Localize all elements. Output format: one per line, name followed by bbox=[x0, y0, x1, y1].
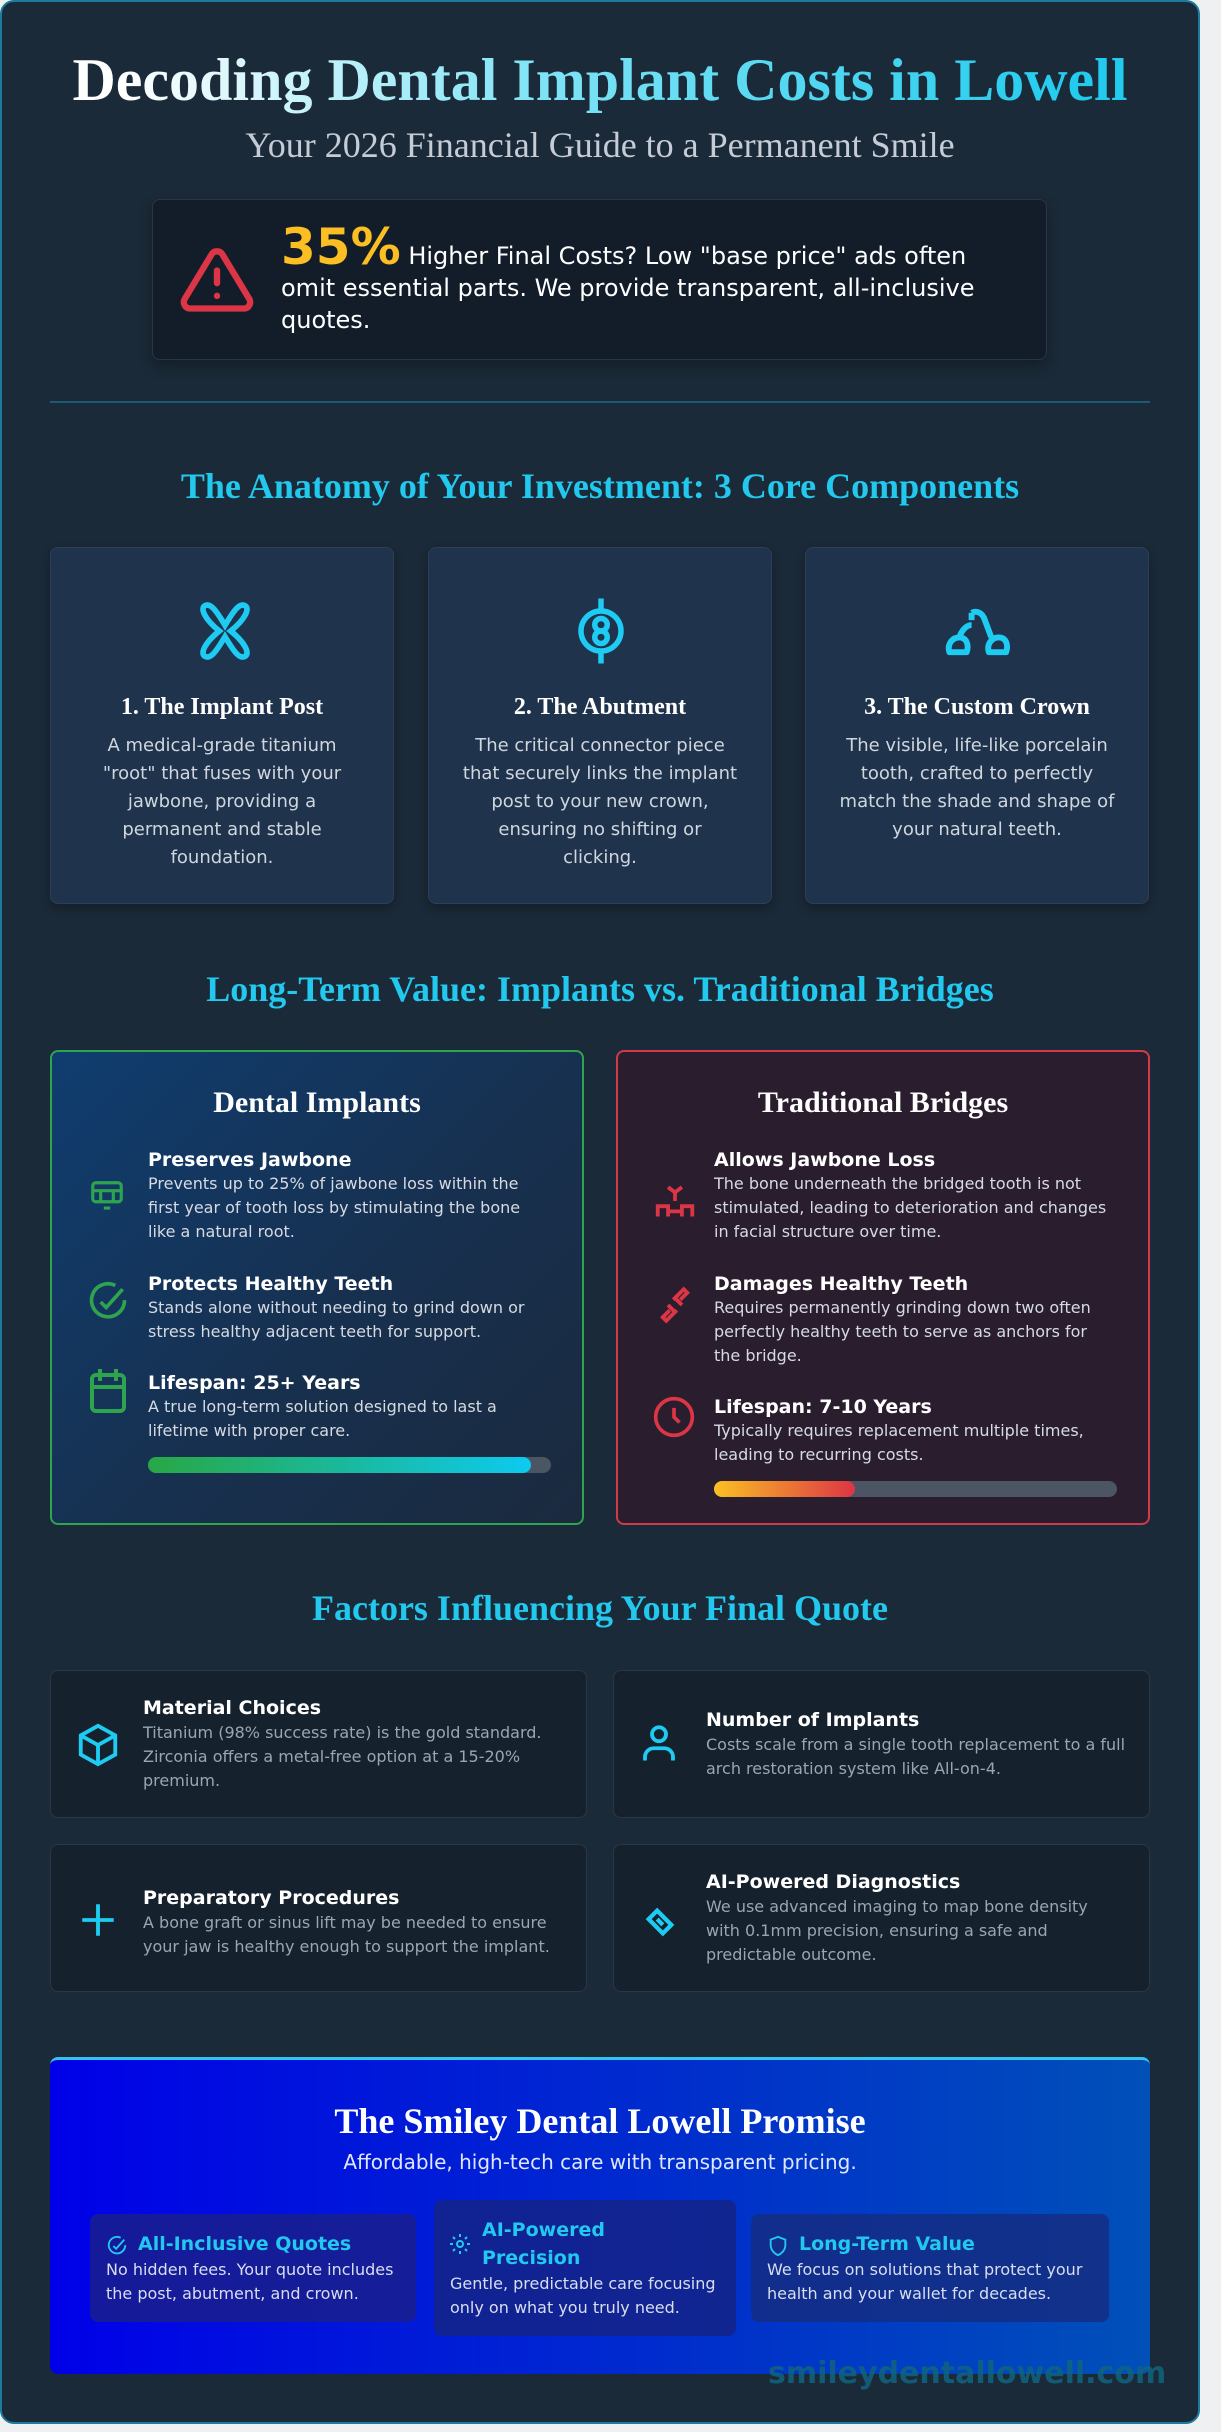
factor: number: Costs scale from a single tooth replacement to a full arch restoration system like All-on-4. bbox=[706, 1735, 1125, 1778]
bar: bridge lifespan bbox=[714, 1481, 1117, 1497]
icon: post bbox=[200, 602, 250, 660]
panel title: Dental Implants bbox=[213, 1086, 421, 1119]
panel title: Traditional Bridges bbox=[758, 1086, 1008, 1119]
item: protects teeth bbox=[90, 1273, 524, 1341]
icon: calendar bbox=[90, 1369, 126, 1413]
panel: implant post: A medical-grade titanium "root" that fuses with your jawbone, providing a permanent and stable foundation. bbox=[103, 735, 341, 868]
promise title: The Smiley Dental Lowell Promise bbox=[334, 2101, 866, 2141]
item: lifespan 25+ bbox=[90, 1369, 497, 1440]
panel: abutment bbox=[428, 547, 772, 904]
alert callout bbox=[152, 199, 1047, 360]
watermark: smileydentallowell.com bbox=[768, 2356, 1166, 2391]
icon: cube bbox=[78, 1724, 118, 1766]
icon: clock bbox=[654, 1396, 694, 1438]
factor: preparatory: Preparatory Procedures bbox=[143, 1887, 400, 1909]
panel: crown bbox=[805, 547, 1149, 904]
promise card: AI precision: Gentle, predictable care focusing only on what you truly need. bbox=[450, 2274, 716, 2317]
promise card: AI precision: AI-Powered bbox=[482, 2219, 605, 2241]
factor: AI diagnostics bbox=[613, 1844, 1150, 1992]
panel: crown: 3. The Custom Crown bbox=[864, 694, 1090, 720]
item: lifespan 7-10 bbox=[654, 1396, 1084, 1464]
factor: material: Material Choices bbox=[143, 1697, 321, 1719]
item: lifespan 7-10: Lifespan: 7-10 Years bbox=[714, 1396, 932, 1418]
item: lifespan 25+: A true long-term solution designed to last a lifetime with proper care. bbox=[148, 1397, 497, 1440]
factor: number bbox=[613, 1670, 1150, 1818]
title: Decoding Dental Implant Costs in Lowell bbox=[72, 47, 1128, 113]
promise card: long-term value: Long-Term Value bbox=[799, 2233, 975, 2255]
promise card: all-inclusive: No hidden fees. Your quote includes the post, abutment, and crown. bbox=[106, 2260, 393, 2303]
item: jawbone loss bbox=[656, 1149, 1106, 1241]
panel: abutment: The critical connector piece that securely links the implant post to your new crown, ensuring no shifting or clicking. bbox=[463, 735, 737, 868]
heading: anatomy: The Anatomy of Your Investment: 3 Core Components bbox=[181, 466, 1019, 506]
panel: implant post: 1. The Implant Post bbox=[121, 694, 323, 720]
promise card: AI precision bbox=[434, 2200, 736, 2336]
icon: warning bbox=[180, 248, 254, 312]
factor: material: Titanium (98% success rate) is the gold standard. Zirconia offers a metal-free option at a 15-20% premium. bbox=[143, 1723, 542, 1790]
factor: number: Number of Implants bbox=[706, 1709, 919, 1731]
factor: AI diagnostics: AI-Powered Diagnostics bbox=[706, 1871, 960, 1893]
panel: abutment: 2. The Abutment bbox=[514, 694, 686, 720]
item: jawbone loss: The bone underneath the bridged tooth is not stimulated, leading to deterioration and changes in facial structure over time. bbox=[714, 1174, 1106, 1241]
promise card: long-term value bbox=[751, 2214, 1109, 2322]
panel: crown: The visible, life-like porcelain tooth, crafted to perfectly match the shade and shape of your natural teeth. bbox=[840, 735, 1114, 840]
panel: dental implants bbox=[50, 1050, 584, 1525]
item: jawbone loss: Allows Jawbone Loss bbox=[714, 1149, 935, 1171]
promise card: all-inclusive bbox=[90, 2214, 416, 2322]
factor: AI diagnostics: We use advanced imaging to map bone density with 0.1mm precision, ensuring a safe and predictable outcome. bbox=[706, 1897, 1088, 1964]
item: protects teeth: Stands alone without needing to grind down or stress healthy adjacent teeth for support. bbox=[148, 1298, 524, 1341]
promise card: long-term value: We focus on solutions that protect your health and your wallet for decades. bbox=[767, 2260, 1082, 2303]
icon: jaw bbox=[91, 1181, 123, 1210]
icon: check bbox=[90, 1282, 126, 1319]
icon: shield bbox=[770, 2236, 786, 2256]
item: preserves jawbone: Prevents up to 25% of jawbone loss within the first year of tooth loss by stimulating the bone like a natural root. bbox=[148, 1174, 520, 1241]
factor: preparatory bbox=[50, 1844, 587, 1992]
icon: crown bbox=[946, 608, 1010, 656]
heading: long-term value: Long-Term Value: Implants vs. Traditional Bridges bbox=[206, 969, 994, 1009]
icon: scan bbox=[646, 1908, 674, 1936]
item: lifespan 25+: Lifespan: 25+ Years bbox=[148, 1372, 361, 1394]
promise panel bbox=[50, 2057, 1150, 2374]
factor: preparatory: A bone graft or sinus lift may be needed to ensure your jaw is healthy enough to support the implant. bbox=[143, 1913, 550, 1956]
promise subtitle: Affordable, high-tech care with transparent pricing. bbox=[343, 2150, 857, 2174]
item: preserves jawbone bbox=[91, 1149, 520, 1241]
promise card: AI precision: Precision bbox=[482, 2247, 580, 2269]
icon: person bbox=[643, 1725, 675, 1760]
item: damages teeth: Damages Healthy Teeth bbox=[714, 1273, 968, 1295]
icon: abutment bbox=[578, 598, 624, 664]
promise card: all-inclusive: All-Inclusive Quotes bbox=[138, 2233, 351, 2255]
heading: factors: Factors Influencing Your Final Quote bbox=[312, 1588, 888, 1628]
panel: implant post bbox=[50, 547, 394, 904]
icon: gear bbox=[450, 2234, 470, 2254]
icon: plus bbox=[82, 1904, 114, 1936]
item: lifespan 7-10: Typically requires replacement multiple times, leading to recurring costs. bbox=[714, 1421, 1084, 1464]
icon: bone loss bbox=[656, 1186, 694, 1216]
item: preserves jawbone: Preserves Jawbone bbox=[148, 1149, 351, 1171]
icon: broken link bbox=[660, 1286, 690, 1324]
item: damages teeth bbox=[660, 1273, 1091, 1365]
panel: traditional bridges bbox=[616, 1050, 1150, 1525]
bar: implant lifespan bbox=[148, 1457, 551, 1473]
alert text: 35% Higher Final Costs? Low "base price" ads often omit essential parts. We provide transparent, all-inclusive quotes. bbox=[281, 218, 974, 334]
icon: check circle bbox=[108, 2236, 126, 2254]
item: protects teeth: Protects Healthy Teeth bbox=[148, 1273, 393, 1295]
factor: material bbox=[50, 1670, 587, 1818]
item: damages teeth: Requires permanently grinding down two often perfectly healthy teeth to serve as anchors for the bridge. bbox=[714, 1298, 1091, 1365]
subtitle: Your 2026 Financial Guide to a Permanent Smile bbox=[245, 125, 955, 165]
